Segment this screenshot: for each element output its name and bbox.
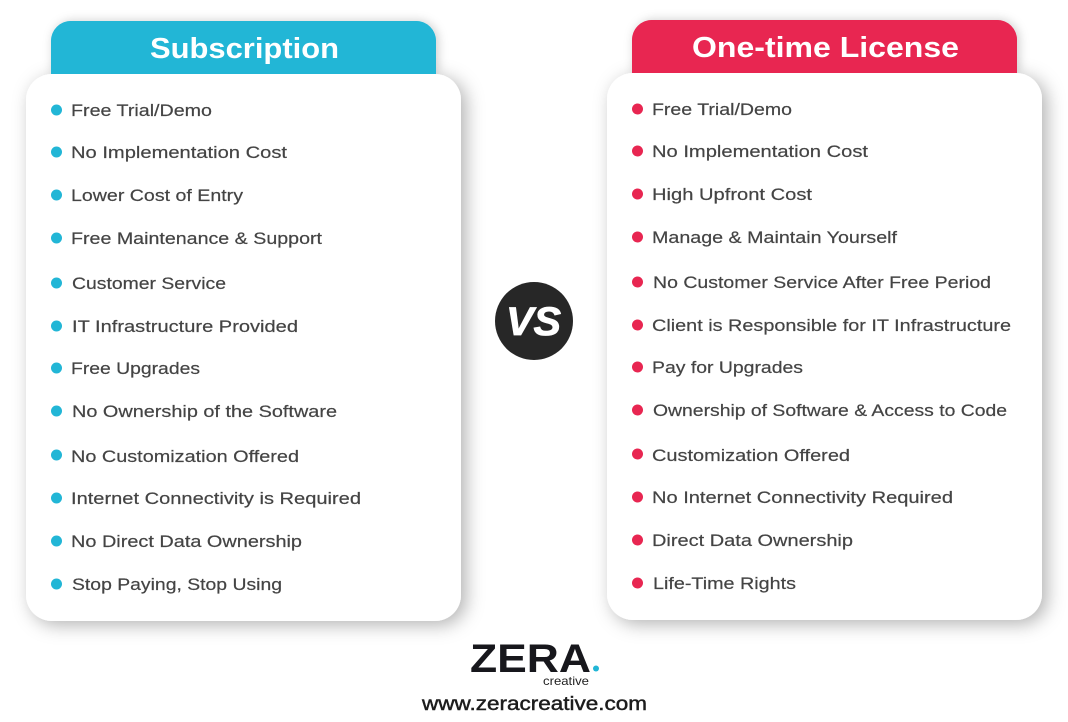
item: No Internet Connectivity Required: No Internet Connectivity Required (652, 488, 953, 507)
item: No Implementation Cost: No Implementation Cost (652, 142, 868, 161)
item: Free Upgrades: Free Upgrades (71, 359, 200, 378)
item: Stop Paying, Stop Using: Stop Paying, Stop Using (72, 575, 282, 594)
item: No Ownership of the Software: No Ownership of the Software (72, 402, 337, 421)
item: Ownership of Software & Access to Code: Ownership of Software & Access to Code (653, 401, 1007, 420)
item: Customer Service: Customer Service (72, 274, 226, 293)
item: Direct Data Ownership: Direct Data Ownership (652, 531, 853, 550)
logo: ZERA creative: creative (543, 674, 589, 688)
item: No Implementation Cost: No Implementation Cost (71, 143, 287, 162)
item: Free Trial/Demo: Free Trial/Demo (652, 100, 792, 119)
list: One-time License features (632, 100, 1011, 593)
panel: Subscription (26, 21, 461, 621)
item: Lower Cost of Entry: Lower Cost of Entry (71, 186, 244, 205)
item: Client is Responsible for IT Infrastructure: Client is Responsible for IT Infrastructure (652, 316, 1011, 335)
card: One-time License list background (607, 73, 1042, 620)
item: No Direct Data Ownership: No Direct Data Ownership (71, 532, 302, 551)
item: No Customer Service After Free Period: No Customer Service After Free Period (653, 273, 991, 292)
panel: One-time License (607, 20, 1042, 620)
list: Subscription features (51, 101, 361, 594)
item: Internet Connectivity is Required: Internet Connectivity is Required (71, 489, 361, 508)
item: Customization Offered: Customization Offered (652, 446, 850, 465)
card: Subscription list background (26, 74, 461, 621)
item: Life-Time Rights: Life-Time Rights (653, 574, 796, 593)
heading: One-time License (632, 20, 1017, 73)
item: Manage & Maintain Yourself: Manage & Maintain Yourself (652, 228, 897, 247)
icon: VS badge: VS (506, 300, 561, 344)
heading: Subscription: Subscription (150, 33, 339, 65)
item: High Upfront Cost: High Upfront Cost (652, 185, 812, 204)
item: Free Trial/Demo: Free Trial/Demo (71, 101, 212, 120)
logo: ZERA creative: ZERA (470, 637, 591, 681)
item: Free Maintenance & Support: Free Maintenance & Support (71, 229, 322, 248)
heading: One-time License: One-time License (692, 32, 959, 64)
item: Pay for Upgrades: Pay for Upgrades (652, 358, 803, 377)
heading: Subscription (51, 21, 436, 74)
item: IT Infrastructure Provided: IT Infrastructure Provided (72, 317, 298, 336)
website url: www.zeracreative.com (421, 694, 647, 715)
item: No Customization Offered: No Customization Offered (71, 447, 299, 466)
icon: VS badge (495, 282, 573, 360)
